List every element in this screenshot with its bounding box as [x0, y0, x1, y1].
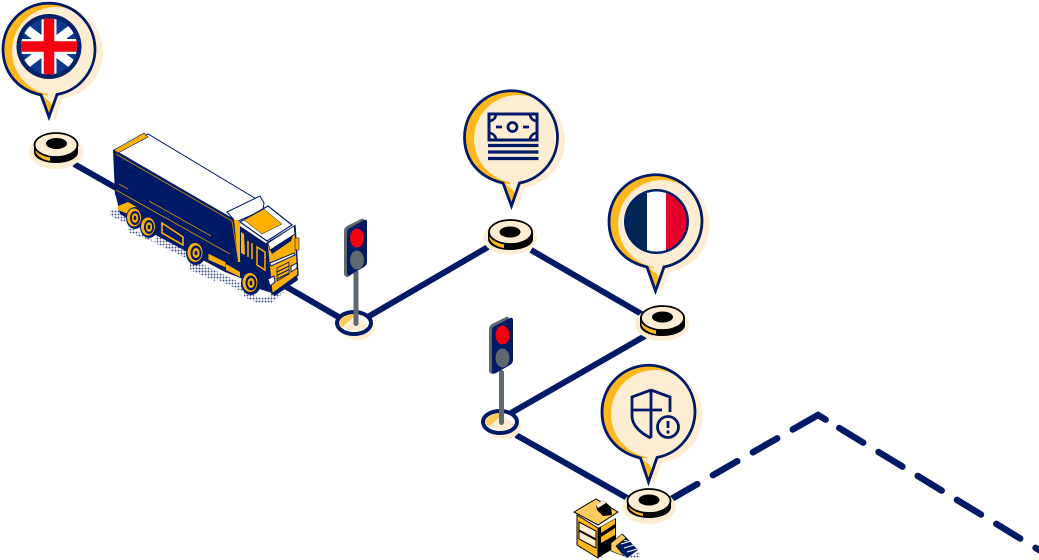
node disc: customs — [622, 489, 676, 524]
chassis — [115, 192, 256, 284]
route line: solid segments — [74, 164, 645, 499]
customs booth building — [574, 499, 640, 558]
truck — [110, 133, 299, 303]
cab front — [267, 226, 298, 294]
grille — [277, 262, 289, 281]
trailer roof — [114, 134, 263, 219]
node disc: UK — [29, 133, 83, 169]
rear bumper — [118, 202, 140, 214]
fairing — [227, 196, 264, 222]
map pin: France flag — [609, 175, 710, 294]
windshield stripe — [270, 253, 295, 266]
icon: France flag — [624, 189, 689, 254]
trailer side — [113, 150, 240, 262]
cab roof — [240, 206, 292, 241]
trailer roof stripe — [114, 133, 148, 153]
map pin: UK flag — [2, 2, 103, 121]
traffic light 1 — [337, 219, 375, 340]
cab side — [240, 226, 272, 293]
node disc: money — [483, 220, 537, 255]
fuel boxes — [162, 223, 183, 245]
route line: dashed continuation — [673, 415, 1039, 550]
node disc: France — [635, 306, 689, 341]
map pin: customs shield icon — [602, 365, 702, 485]
traffic light 2 — [483, 317, 521, 439]
map pin: payment money icon — [464, 90, 565, 209]
orange strut — [234, 219, 243, 262]
icon: UK flag — [16, 14, 82, 79]
icon: shield with alert — [632, 390, 678, 438]
mirror — [295, 238, 299, 250]
icon: banknote stack — [488, 114, 538, 158]
truck wheels — [126, 207, 261, 295]
headlights — [268, 276, 275, 286]
truck ground shadow — [110, 208, 284, 303]
